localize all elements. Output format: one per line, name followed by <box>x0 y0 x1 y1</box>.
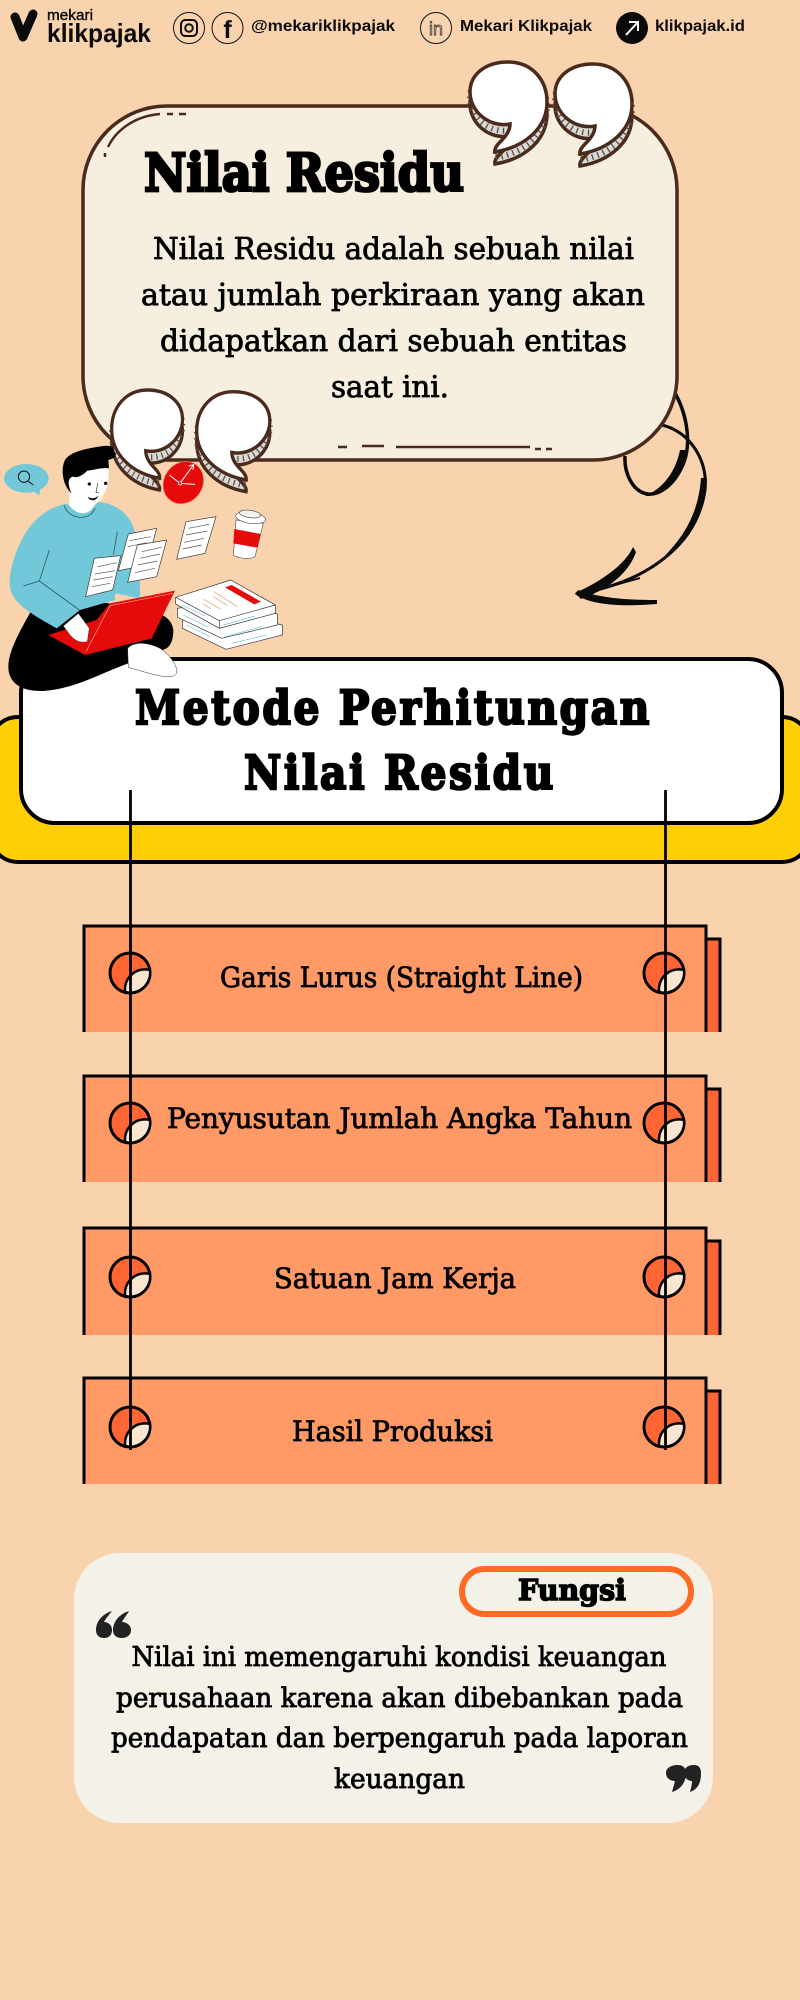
sweater lines <box>23 505 117 610</box>
heading: Metode Perhitungan Nilai Residu: Metode Perhitungan <box>135 681 652 736</box>
panel: yellow band <box>0 717 800 862</box>
text: definition: atau jumlah perkiraan yang akan <box>141 278 645 313</box>
panel: section title card <box>21 659 782 823</box>
text: function description: Nilai ini memengaruhi kondisi keuangan <box>132 1642 666 1673</box>
text: linkedin name: Mekari Klikpajak <box>460 18 592 35</box>
illustration: person working on laptop <box>4 390 282 691</box>
text: definition: saat ini. <box>331 370 449 405</box>
icon: search speech bubble <box>4 464 49 496</box>
icon: facebook <box>212 12 243 44</box>
icon: linkedin <box>420 12 452 44</box>
binding rings <box>110 953 684 1447</box>
icon: coffee cup <box>233 509 266 558</box>
icon: linkedin: in <box>429 19 443 39</box>
item: Hasil Produksi <box>84 1378 720 1484</box>
icon: opening quote <box>96 1611 131 1638</box>
logo: mekari klikpajak <box>15 7 152 48</box>
text: website: klikpajak.id <box>655 18 745 35</box>
item: Satuan Jam Kerja <box>84 1228 720 1335</box>
icon: large closing quotes <box>470 62 632 166</box>
text: definition <box>141 232 645 405</box>
heading: Metode Perhitungan Nilai Residu <box>135 681 652 801</box>
header bar <box>15 7 745 48</box>
icon: facebook: f <box>223 16 232 44</box>
laptop <box>48 591 175 655</box>
documents <box>86 517 216 597</box>
icon: stack of books <box>176 580 282 649</box>
item: Satuan Jam Kerja: Satuan Jam Kerja <box>274 1262 516 1295</box>
item: Garis Lurus <box>84 926 720 1032</box>
text: definition: Nilai Residu adalah sebuah nilai <box>153 232 634 267</box>
panel: Fungsi <box>74 1553 713 1823</box>
heading: Nilai Residu: Nilai Residu <box>144 143 464 204</box>
item: Penyusutan Jumlah Angka Tahun <box>84 1076 720 1182</box>
text: function description: perusahaan karena akan dibebankan pada <box>116 1683 683 1714</box>
arrow: hand drawn curl <box>575 388 707 605</box>
item: Garis Lurus: Garis Lurus (Straight Line) <box>220 961 583 994</box>
text: instagram and facebook handle: @mekariklikpajak <box>251 18 395 35</box>
text: function description <box>111 1642 688 1795</box>
hand <box>63 613 89 642</box>
head <box>63 446 116 513</box>
sweater <box>10 502 140 628</box>
label: Fungsi pill <box>462 1569 691 1614</box>
logo: mekari klikpajak: mekari <box>47 7 93 24</box>
icon: instagram <box>174 12 204 44</box>
item: Hasil Produksi: Hasil Produksi <box>292 1415 493 1448</box>
heading: Metode Perhitungan Nilai Residu: Nilai Residu <box>244 746 556 801</box>
foot <box>128 643 177 677</box>
icon: closing quote <box>666 1765 701 1792</box>
legs <box>8 602 173 691</box>
icon: website arrow <box>616 12 648 44</box>
text: definition: didapatkan dari sebuah entitas <box>160 324 627 359</box>
icon: clock <box>155 454 212 512</box>
icon: large opening quotes <box>112 390 270 492</box>
label: Fungsi pill: Fungsi <box>518 1573 626 1607</box>
connector lines <box>130 790 666 1450</box>
panel: definition speech bubble <box>83 106 677 460</box>
logo: mekari klikpajak: klikpajak <box>47 18 152 48</box>
text: function description: pendapatan dan berpengaruh pada laporan <box>111 1723 688 1754</box>
item: Penyusutan Jumlah Angka Tahun: Penyusutan Jumlah Angka Tahun <box>167 1102 632 1135</box>
text: function description: keuangan <box>334 1764 465 1795</box>
